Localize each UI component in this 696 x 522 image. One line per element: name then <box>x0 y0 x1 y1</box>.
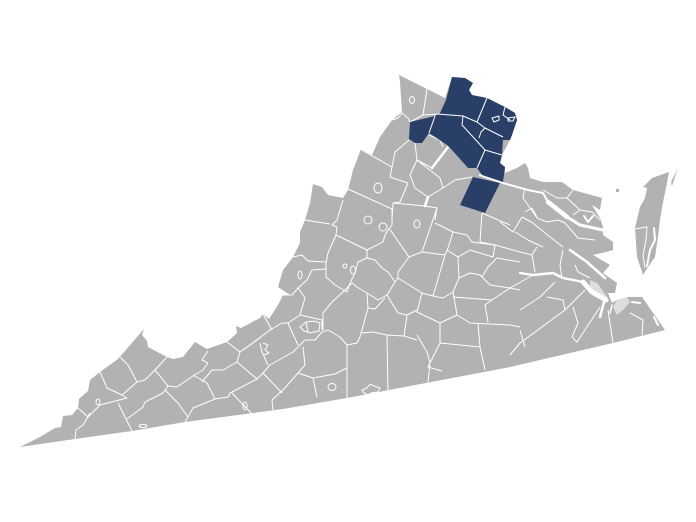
Caroline county <box>460 177 500 213</box>
state landmass <box>20 75 665 447</box>
rivers <box>480 175 658 325</box>
northern Virginia region <box>409 77 517 182</box>
county lines within region <box>429 98 515 168</box>
county boundaries <box>75 89 643 439</box>
eastern shore peninsula <box>616 168 678 275</box>
independent cities <box>96 96 420 428</box>
hampton roads light areas <box>590 280 630 315</box>
highlighted counties <box>409 77 517 213</box>
